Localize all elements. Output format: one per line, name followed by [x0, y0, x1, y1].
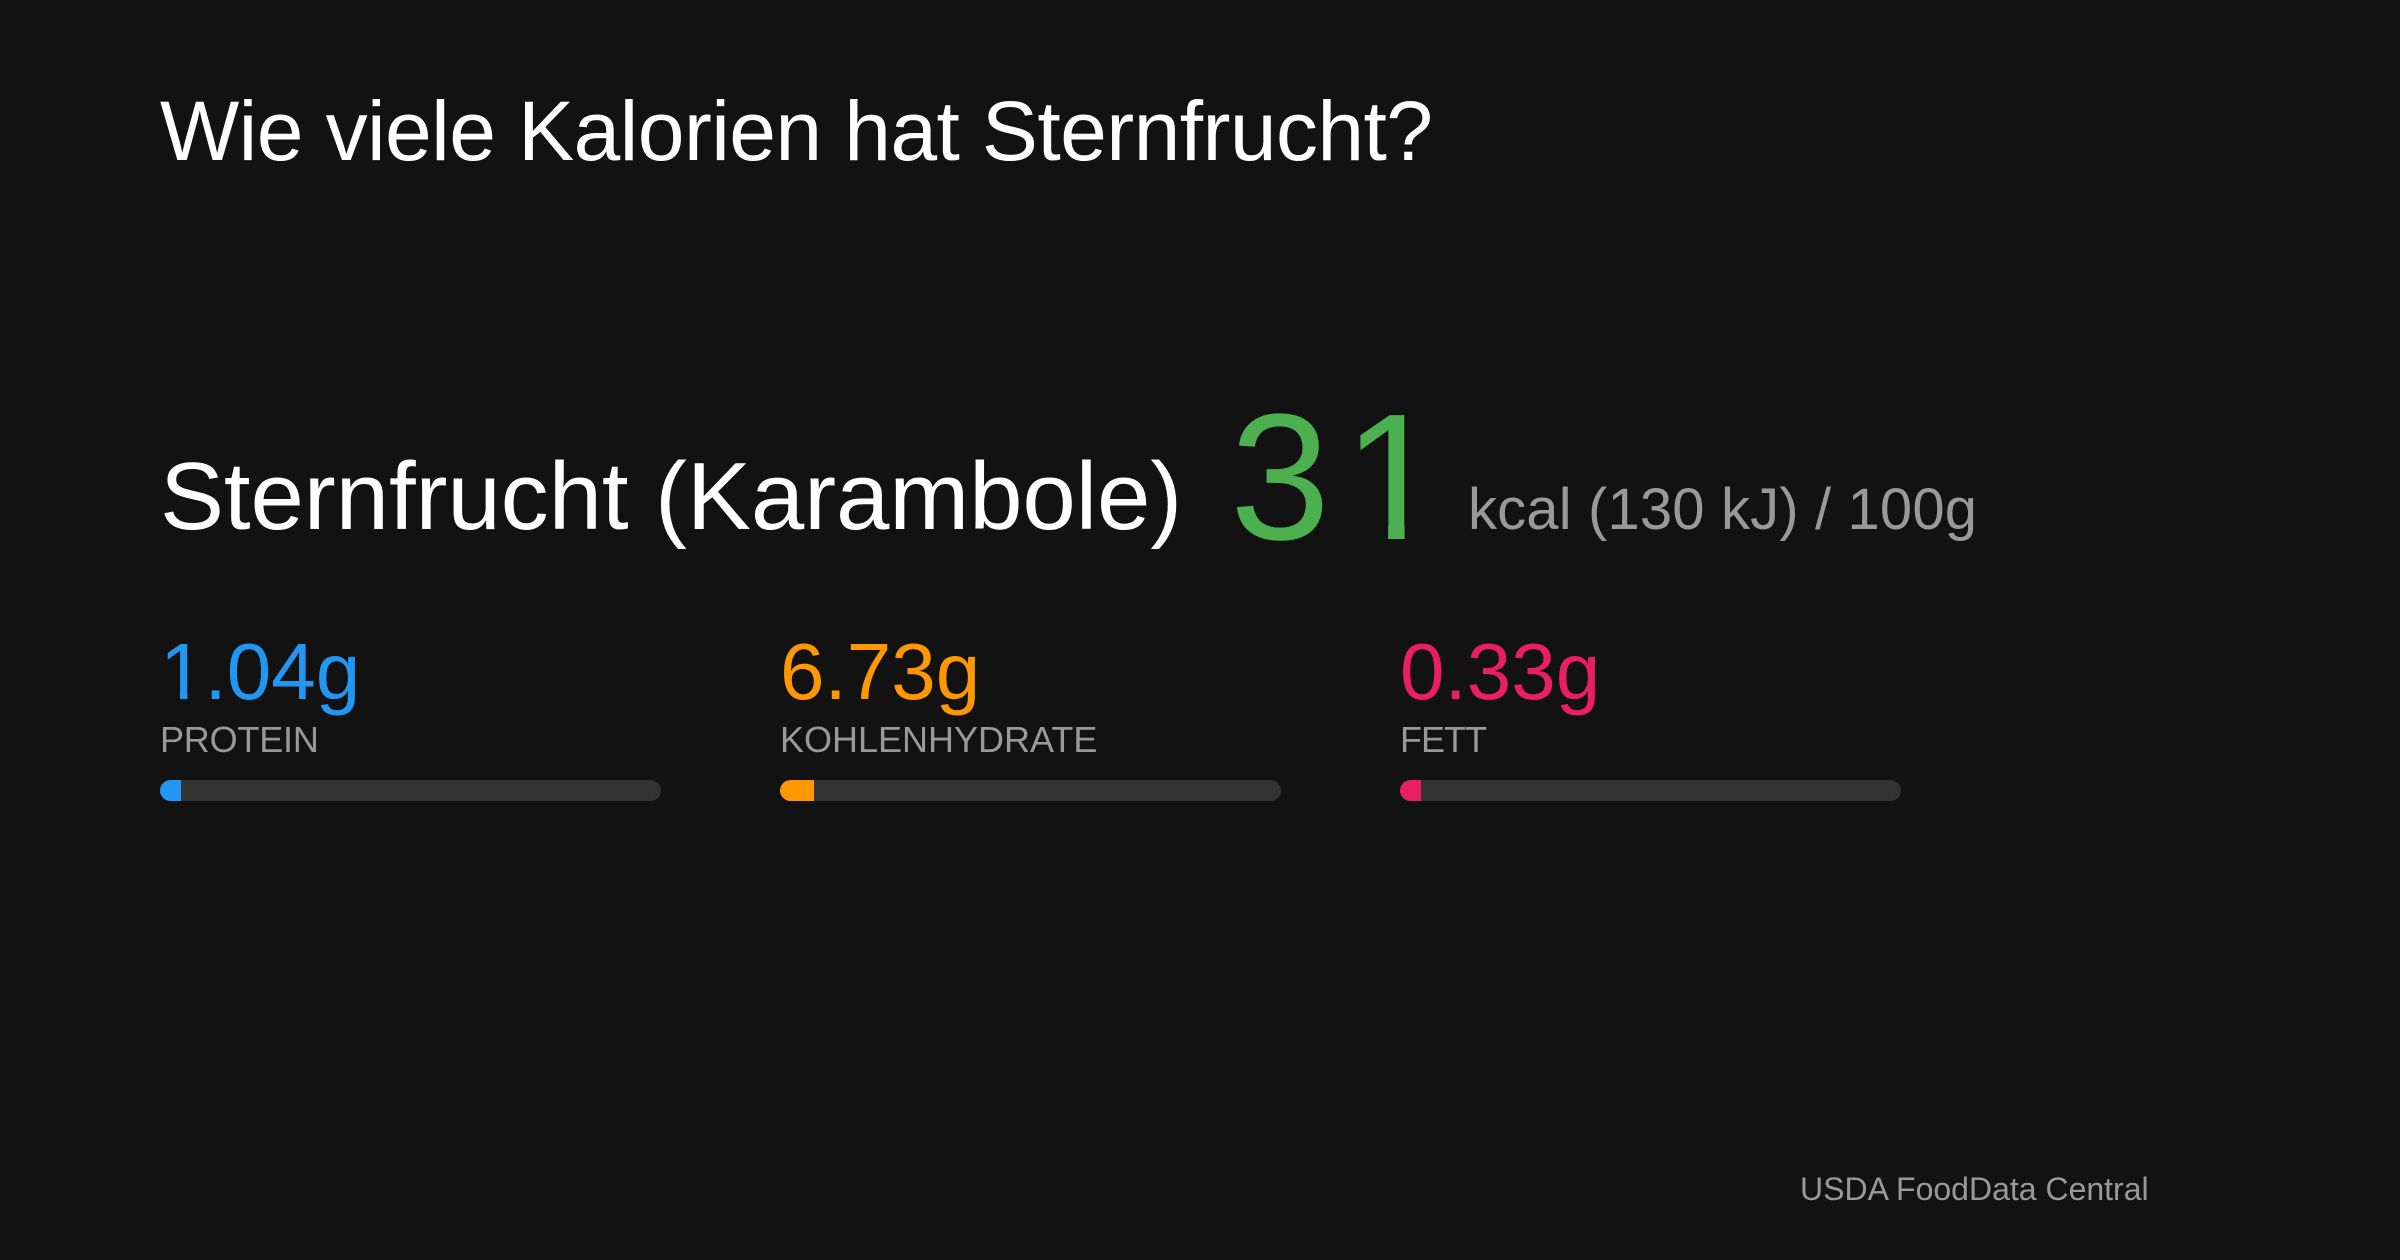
protein value: 1	[160, 627, 204, 716]
protein label: PROTEIN	[160, 719, 319, 760]
protein bar	[160, 780, 661, 801]
title: Wie viele Kalorien hat Sternfrucht?	[160, 84, 1432, 178]
calorie number: 3	[1230, 377, 1343, 578]
food name: Sternfrucht (Karambole)	[160, 443, 1182, 550]
panel: carbohydrates	[780, 627, 1281, 801]
calorie number	[1230, 377, 1405, 578]
carbohydrate label: KOHLENHYDRATE	[780, 719, 1097, 760]
panel: fat	[1400, 627, 1901, 801]
panel: protein	[160, 627, 661, 801]
protein value: .04g	[204, 627, 360, 716]
carbohydrate value: 6.73g	[780, 627, 980, 716]
fat value: 0.33g	[1400, 627, 1600, 716]
calorie number: 1	[1343, 377, 1456, 578]
calorie unit: kcal (130 kJ) / 100g	[1468, 477, 1977, 542]
fat bar	[1400, 780, 1901, 801]
source: USDA FoodData Central	[1800, 1171, 2149, 1207]
fat label: FETT	[1400, 719, 1486, 760]
carbohydrate bar	[780, 780, 1281, 801]
